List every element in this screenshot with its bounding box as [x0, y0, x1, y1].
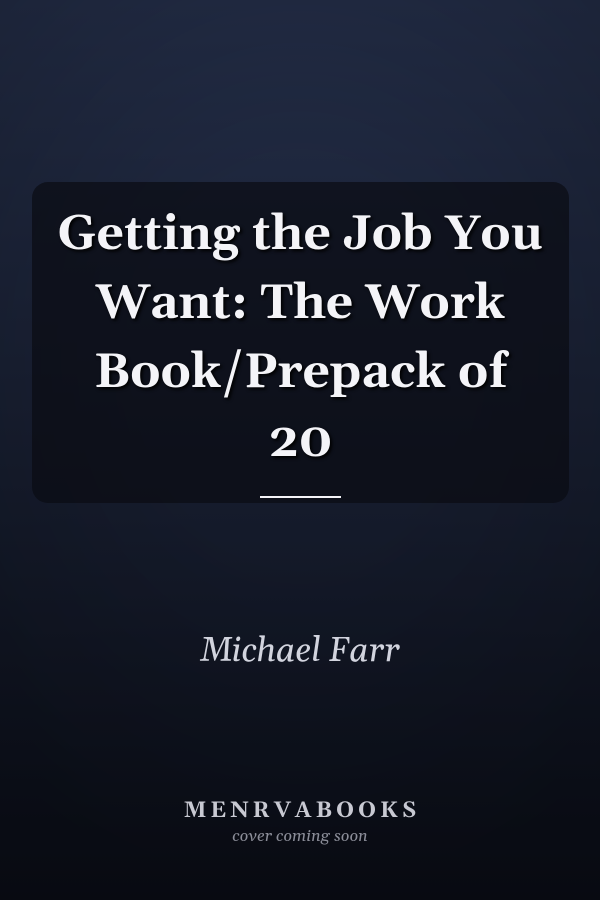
title: Want: The Work	[96, 274, 505, 334]
publisher name: MENRVABOOKS	[184, 797, 420, 825]
cover note: cover coming soon	[232, 826, 368, 847]
title: 20	[269, 412, 332, 472]
title: Book/Prepack of	[94, 344, 507, 404]
title: Getting the Job You	[58, 206, 543, 266]
author name: Michael Farr	[200, 630, 400, 673]
panel: title backdrop	[32, 182, 569, 502]
title underline rule	[260, 496, 341, 498]
title	[58, 206, 544, 472]
